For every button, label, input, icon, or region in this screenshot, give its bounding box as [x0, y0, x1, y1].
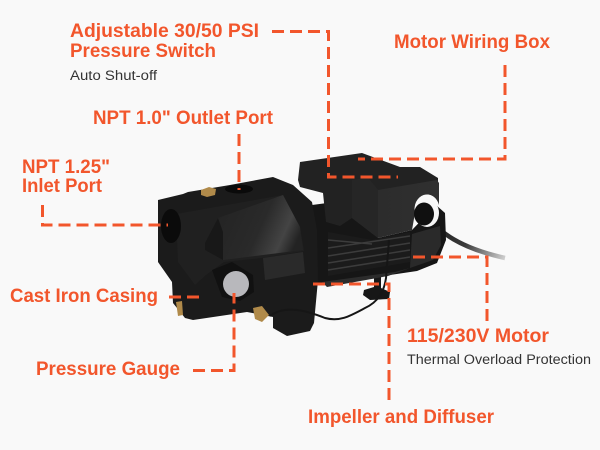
- label: cast iron casing: Cast Iron Casing: [10, 286, 158, 307]
- label: inlet port: [22, 157, 110, 197]
- label: pressure switch: Auto Shut-off: [70, 68, 157, 83]
- motor wiring box: [298, 153, 438, 226]
- brass fittings: [176, 187, 269, 322]
- label: pressure switch: [70, 21, 259, 83]
- pressure switch cover: [352, 178, 439, 238]
- inlet port: [161, 209, 181, 243]
- label: impeller and diffuser: Impeller and Diffuser: [308, 407, 495, 428]
- leader: inlet port: [42, 205, 168, 225]
- outlet port: [225, 184, 253, 194]
- label: motor wiring box: Motor Wiring Box: [394, 32, 550, 53]
- label: inlet port: NPT 1.25": [22, 157, 110, 178]
- leader: outlet port: [238, 134, 240, 190]
- label: pressure gauge: Pressure Gauge: [36, 359, 180, 380]
- leader: cast iron casing: [169, 296, 200, 298]
- leader: pressure gauge: [193, 293, 234, 370]
- pressure gauge: [212, 262, 254, 301]
- leader: motor wiring box: [358, 65, 505, 159]
- label: inlet port: Inlet Port: [22, 176, 103, 197]
- label: motor: Thermal Overload Protection: [407, 352, 591, 367]
- leader: 115/230V motor: [413, 257, 487, 321]
- label: motor: [407, 326, 591, 367]
- leader: pressure switch: [272, 32, 398, 177]
- power cable: [423, 213, 505, 258]
- cast iron casing: [158, 177, 318, 336]
- pump illustration: [158, 153, 505, 336]
- label: pressure switch: Pressure Switch: [70, 41, 216, 62]
- lower cable: [270, 240, 389, 319]
- motor body: [312, 200, 446, 287]
- support foot: [363, 274, 390, 300]
- label: pressure switch: Adjustable 30/50 PSI: [70, 21, 259, 42]
- leader: impeller and diffuser: [313, 284, 389, 400]
- label: outlet port: NPT 1.0" Outlet Port: [93, 108, 274, 129]
- label: motor: 115/230V Motor: [407, 326, 550, 347]
